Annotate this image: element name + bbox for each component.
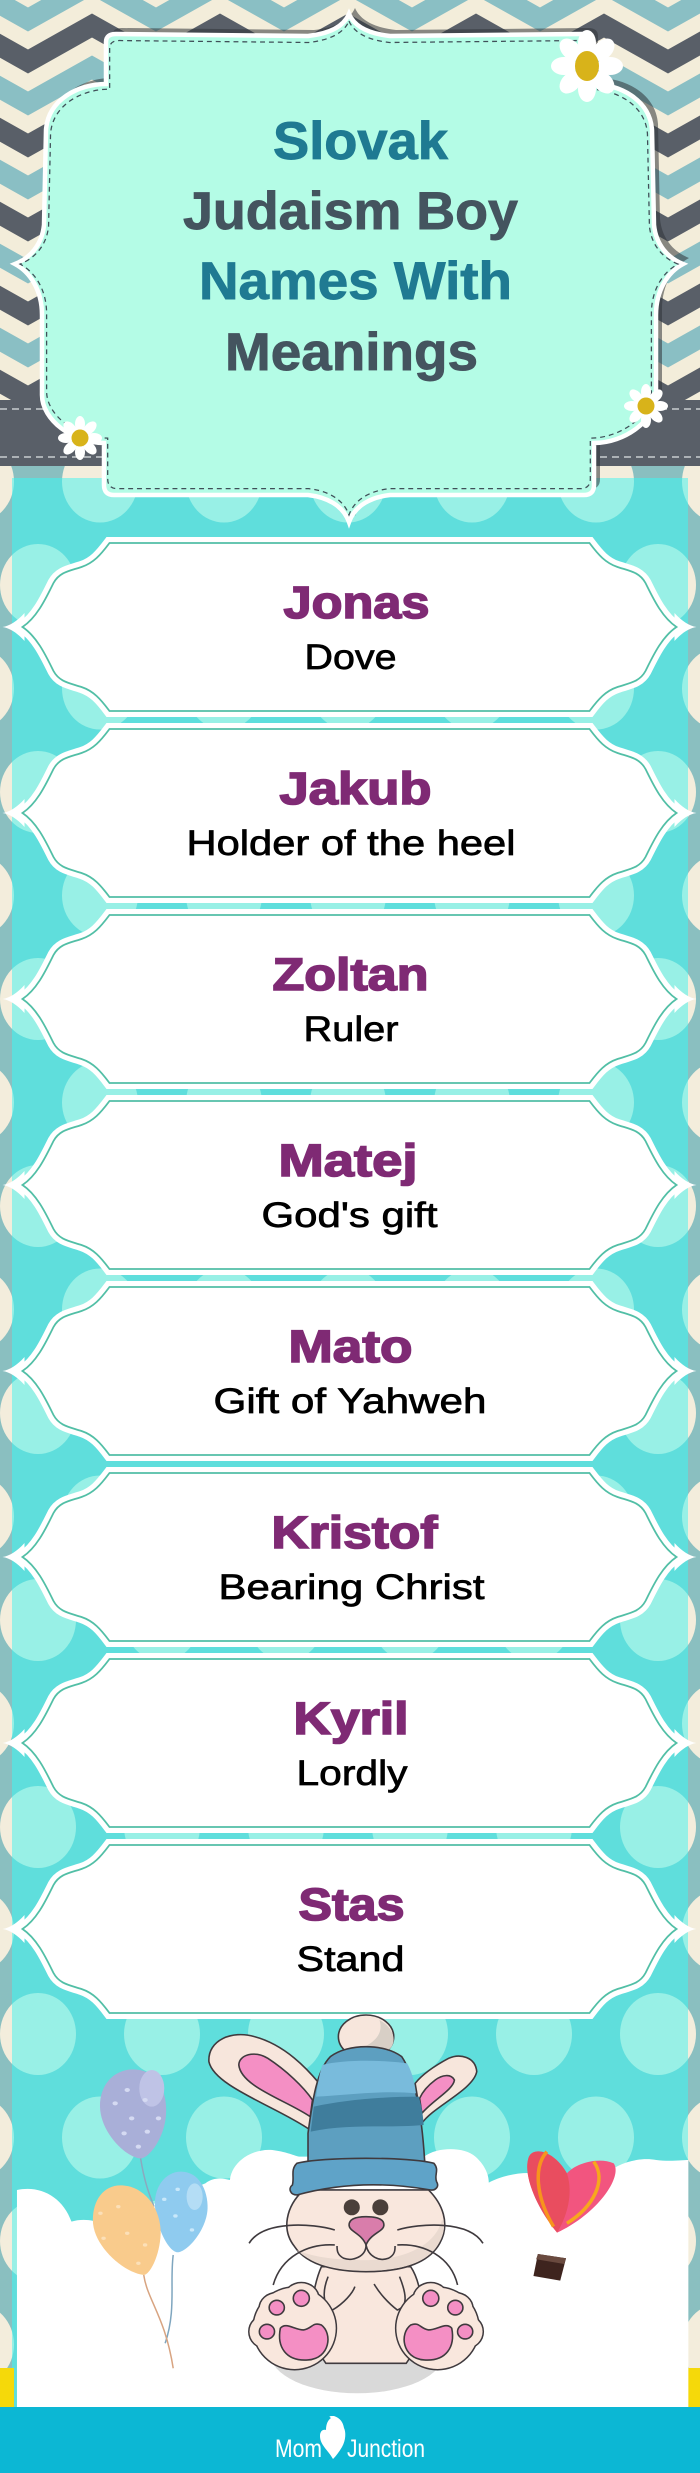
card: Kristof: Kristof [272,1507,439,1558]
card: Jakub: Holder of the heel [186,824,516,863]
logo: MomJunction: Junction [347,2435,425,2463]
card: Kyril: Lordly [296,1754,408,1793]
card: Matej: Matej [278,1135,418,1186]
card: Stas: Stand [296,1940,405,1979]
card: Stas [2,1845,696,2013]
card: Mato [2,1287,696,1455]
card: Jonas: Dove [304,638,396,677]
left foot [250,2283,336,2369]
ground shadow [270,2313,444,2393]
pompom [338,2015,394,2058]
striped hat [290,2047,438,2195]
head [287,2190,445,2272]
card: Matej [2,1101,696,1269]
title: Meanings [225,323,478,382]
right foot [396,2283,483,2369]
logo icon [320,2416,345,2459]
card: Kristof: Bearing Christ [218,1568,485,1607]
white clouds [17,2149,688,2408]
card: Kyril: Kyril [294,1693,408,1744]
card: Zoltan: Ruler [304,1010,399,1049]
ears [209,2035,477,2130]
card: Kristof [2,1473,696,1641]
title: Slovak [273,112,449,171]
title: Names With [199,252,512,311]
logo: MomJunction [275,2416,425,2463]
chevron header background [0,0,700,400]
card: Matej: God's gift [262,1196,438,1235]
card: Jonas: Jonas [284,577,430,628]
footer bar [0,2407,700,2473]
icon: daisy bottom left [58,416,102,460]
card: Kyril [2,1659,696,1827]
panel: title plaque [15,8,689,522]
card: Mato: Gift of Yahweh [214,1382,486,1421]
card: Jakub [2,729,696,897]
title: Judaism Boy [183,182,519,241]
card: Zoltan: Zoltan [272,949,428,1000]
logo: MomJunction: Mom [275,2435,322,2463]
polka dot background [0,466,700,2408]
balloons [93,2069,208,2368]
body [312,2267,422,2363]
icon: balloon basket [533,2254,566,2281]
illustration scene [17,2015,688,2408]
whiskers [249,2225,483,2285]
icon: heart hot air balloon [527,2151,616,2233]
title [183,112,519,382]
dark ribbon band [0,400,700,466]
card: Jonas [2,543,696,711]
card: Mato: Mato [288,1321,413,1372]
card: Jakub: Jakub [280,763,432,814]
arms [324,2277,405,2310]
card: Zoltan [2,915,696,1083]
icon: daisy bottom right [624,384,668,428]
card: Stas: Stas [298,1879,404,1930]
bunny character [209,2015,483,2393]
icon: daisy top right [551,30,623,102]
